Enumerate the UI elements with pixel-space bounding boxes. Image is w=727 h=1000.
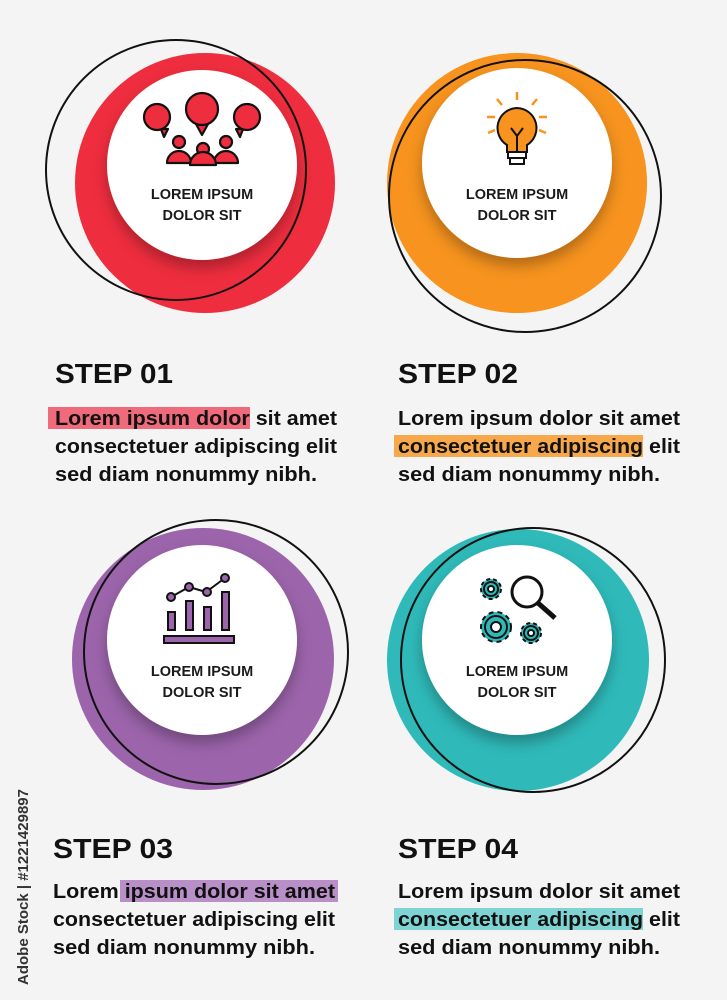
- label: LOREM IPSUM: [466, 187, 568, 203]
- text block: step 03: Lorem ipsum dolor sit amet: [53, 881, 335, 903]
- label: [466, 664, 568, 701]
- text block: step 03: sed diam nonummy nibh.: [53, 937, 315, 959]
- icon: people with speech bubbles: [144, 93, 260, 165]
- label: LOREM IPSUM: [151, 664, 253, 680]
- text block: step 04: [394, 833, 680, 959]
- text block: step 04: consectetuer adipiscing elit: [398, 909, 680, 931]
- text block: step 02: consectetuer adipiscing elit: [398, 436, 680, 458]
- icon: bar chart: [164, 574, 234, 643]
- panel: step 01 circle: [46, 40, 335, 313]
- panel: step 04 circle: [387, 528, 665, 792]
- text block: step 04: sed diam nonummy nibh.: [398, 937, 660, 959]
- label: DOLOR SIT: [163, 208, 242, 224]
- text block: step 01: Lorem ipsum dolor sit amet: [55, 408, 337, 430]
- text block: step 03: STEP 03: [53, 833, 173, 864]
- watermark id: Adobe Stock | #1221429897: [15, 789, 32, 985]
- label: DOLOR SIT: [478, 685, 557, 701]
- label: DOLOR SIT: [478, 208, 557, 224]
- text block: step 01: consectetuer adipiscing elit: [55, 436, 337, 458]
- text block: step 01: [48, 358, 337, 486]
- label: LOREM IPSUM: [151, 187, 253, 203]
- label: [466, 187, 568, 224]
- text block: step 03: [53, 833, 338, 959]
- text block: step 01: STEP 01: [55, 358, 173, 389]
- text block: step 04: STEP 04: [398, 833, 518, 864]
- label: [151, 187, 253, 224]
- text block: step 01: sed diam nonummy nibh.: [55, 464, 317, 486]
- text block: step 02: [394, 358, 680, 486]
- panel: step 03 circle: [72, 520, 348, 790]
- icon: gears and magnifier: [481, 577, 555, 643]
- icon: light bulb: [487, 92, 547, 164]
- text block: step 03: consectetuer adipiscing elit: [53, 909, 335, 931]
- text block: step 02: Lorem ipsum dolor sit amet: [398, 408, 680, 430]
- text block: step 02: sed diam nonummy nibh.: [398, 464, 660, 486]
- label: DOLOR SIT: [163, 685, 242, 701]
- label: [151, 664, 253, 701]
- panel: step 02 circle: [387, 53, 661, 332]
- label: LOREM IPSUM: [466, 664, 568, 680]
- text block: step 02: STEP 02: [398, 358, 518, 389]
- text block: step 04: Lorem ipsum dolor sit amet: [398, 881, 680, 903]
